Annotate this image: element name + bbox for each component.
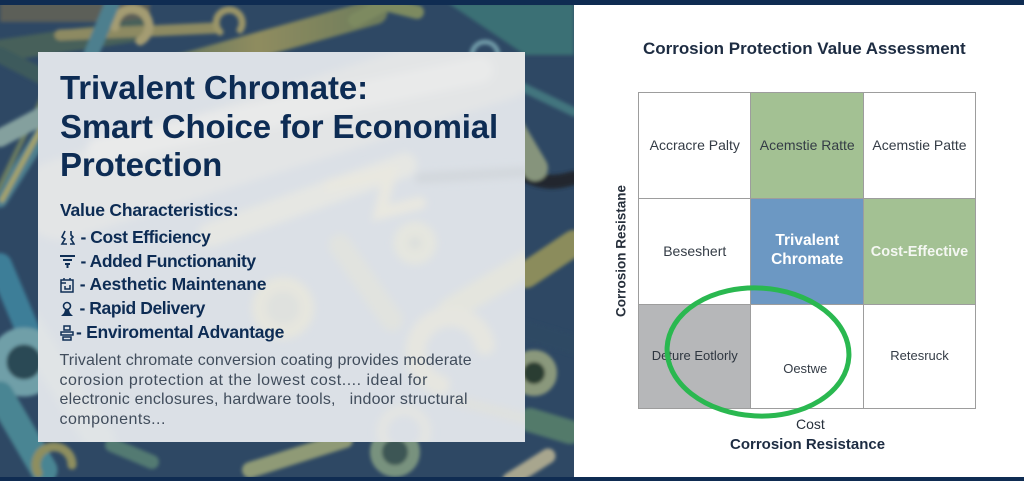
cell: middle left bbox=[638, 198, 752, 306]
subheading: value characteristics: Value Characteristics: bbox=[60, 200, 238, 220]
cell: trivalent chromate: Chromate bbox=[771, 251, 843, 268]
title: Smart Choice for Economial bbox=[60, 108, 498, 144]
cell: top centre bbox=[750, 92, 864, 200]
translucent text panel bbox=[38, 52, 525, 442]
top border bbox=[0, 0, 1024, 5]
cell: cost-effective bbox=[863, 198, 976, 306]
body paragraph bbox=[60, 352, 472, 428]
cell: bottom centre bbox=[750, 304, 864, 409]
cell: bottom centre: Oestwe bbox=[783, 361, 827, 376]
cell: bottom right bbox=[863, 304, 976, 409]
cell: cost-effective: Cost-Effective bbox=[871, 244, 968, 260]
cell: top left bbox=[638, 92, 752, 200]
x axis label: cost: Cost bbox=[796, 416, 825, 432]
title bbox=[60, 69, 498, 183]
cell: top right bbox=[863, 92, 976, 200]
body paragraph: electronic enclosures, hardware tools, indoor structural bbox=[60, 391, 468, 408]
list: aesthetic maintenance: - Aesthetic Maintenane bbox=[80, 274, 266, 294]
green highlight ellipse bbox=[664, 285, 852, 419]
cell: top left: Accracre Palty bbox=[650, 137, 740, 153]
cell: trivalent chromate: Trivalent bbox=[775, 232, 839, 249]
list: environmental advantage: - Enviromental Advantage bbox=[76, 322, 284, 342]
list: added functionality: - Added Functionanity bbox=[80, 251, 256, 271]
chart title: Corrosion Protection Value Assessment bbox=[643, 39, 966, 58]
cell: bottom left: Deture Eotlorly bbox=[652, 348, 738, 363]
body paragraph: Trivalent chromate conversion coating provides moderate bbox=[60, 352, 472, 369]
x axis label: corrosion resistance: Corrosion Resistance bbox=[730, 436, 885, 453]
cell: top right: Acemstie Patte bbox=[872, 137, 967, 153]
title: Protection bbox=[60, 146, 222, 183]
title: Trivalent Chromate: bbox=[60, 69, 368, 106]
bottom border bbox=[0, 477, 1024, 481]
y axis label: Corrosion Resistane bbox=[614, 185, 628, 317]
cell: trivalent chromate bbox=[750, 198, 864, 306]
value matrix chart bbox=[638, 92, 976, 409]
cell: middle left: Beseshert bbox=[663, 243, 726, 259]
list: cost efficiency: - Cost Efficiency bbox=[80, 227, 210, 247]
body paragraph: components... bbox=[60, 411, 166, 428]
background photo: metal tools bbox=[0, 5, 574, 477]
cell: bottom left bbox=[638, 304, 752, 409]
cell: bottom right: Retesruck bbox=[890, 348, 949, 363]
cell: top centre: Acemstie Ratte bbox=[760, 137, 855, 153]
list: rapid delivery: - Rapid Delivery bbox=[79, 298, 205, 318]
body paragraph: corosion protection at the lowest cost.... ideal for bbox=[60, 372, 428, 389]
